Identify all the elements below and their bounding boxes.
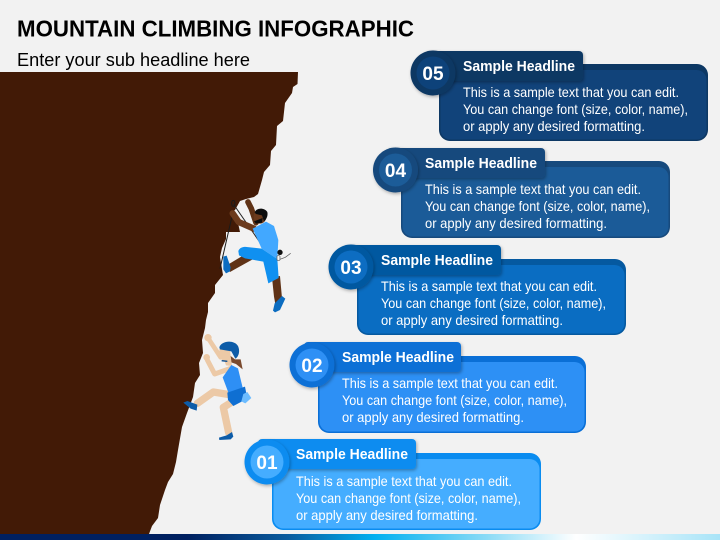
number badge — [290, 342, 334, 388]
head — [219, 349, 232, 366]
number badge: 01 — [256, 453, 278, 474]
headline: Sample Headline — [342, 349, 454, 366]
headline: Sample Headline — [463, 58, 575, 75]
chalk bag — [241, 392, 251, 403]
helmet — [219, 342, 239, 359]
body text: This is a sample text that you can edit. — [342, 375, 558, 391]
headline tab — [258, 439, 416, 469]
body text — [463, 84, 688, 134]
back arm — [248, 202, 256, 223]
front arm — [233, 213, 254, 229]
title: MOUNTAIN CLIMBING INFOGRAPHIC — [17, 16, 414, 42]
shoes — [183, 401, 233, 440]
hands — [203, 334, 212, 361]
body text: or apply any desired formatting. — [463, 118, 645, 134]
number badge: 04 — [385, 161, 406, 182]
subtitle: Enter your sub headline here — [17, 50, 250, 70]
body text: You can change font (size, color, name), — [381, 295, 606, 311]
headline: Sample Headline — [296, 446, 408, 463]
number badge — [328, 244, 374, 290]
card 05 — [410, 50, 708, 141]
headline tab — [304, 342, 461, 372]
headline: Sample Headline — [381, 252, 493, 269]
headline tab — [425, 51, 583, 81]
number badge: 05 — [422, 64, 444, 85]
body text: This is a sample text that you can edit. — [425, 181, 641, 197]
body text: or apply any desired formatting. — [296, 507, 478, 523]
number badge — [410, 50, 456, 96]
number badge — [244, 440, 290, 484]
headline: Sample Headline — [425, 155, 537, 172]
strap — [222, 359, 227, 363]
body text: This is a sample text that you can edit. — [296, 473, 512, 489]
number badge: 03 — [340, 258, 362, 279]
card body — [401, 161, 670, 238]
body text: You can change font (size, color, name), — [425, 198, 650, 214]
number badge — [373, 148, 418, 192]
body text: This is a sample text that you can edit. — [463, 84, 679, 100]
legs — [227, 255, 282, 304]
card 02 — [290, 342, 586, 433]
headline tab — [387, 148, 545, 178]
legs — [197, 392, 232, 433]
body text: or apply any desired formatting. — [342, 409, 524, 425]
card body — [272, 453, 541, 530]
body text — [425, 181, 650, 231]
headline tab — [343, 245, 501, 275]
card 04 — [373, 148, 670, 238]
card body — [357, 259, 626, 335]
climber: man on upper cliff — [220, 200, 291, 312]
shoes — [223, 256, 285, 312]
card 01 — [244, 439, 541, 530]
card body — [318, 356, 586, 433]
body text — [342, 375, 567, 425]
number badge: 02 — [301, 356, 323, 377]
body text: or apply any desired formatting. — [381, 312, 563, 328]
body text: You can change font (size, color, name), — [342, 392, 567, 408]
card 03 — [328, 244, 626, 335]
climber: woman on lower cliff — [183, 334, 251, 440]
shirt — [253, 222, 278, 259]
cliff — [0, 72, 298, 534]
tank top — [223, 365, 243, 393]
body text: You can change font (size, color, name), — [463, 101, 688, 117]
body text: This is a sample text that you can edit. — [381, 278, 597, 294]
harness — [227, 387, 247, 406]
card body — [439, 64, 708, 141]
bottom gradient bar — [0, 534, 720, 540]
ponytail — [227, 353, 243, 369]
arms — [207, 340, 230, 374]
body text — [381, 278, 606, 328]
gear — [277, 250, 291, 260]
rope — [220, 200, 263, 269]
shorts — [238, 247, 279, 283]
head — [254, 209, 268, 224]
body text: or apply any desired formatting. — [425, 215, 607, 231]
body text: You can change font (size, color, name), — [296, 490, 521, 506]
body text — [296, 473, 521, 523]
